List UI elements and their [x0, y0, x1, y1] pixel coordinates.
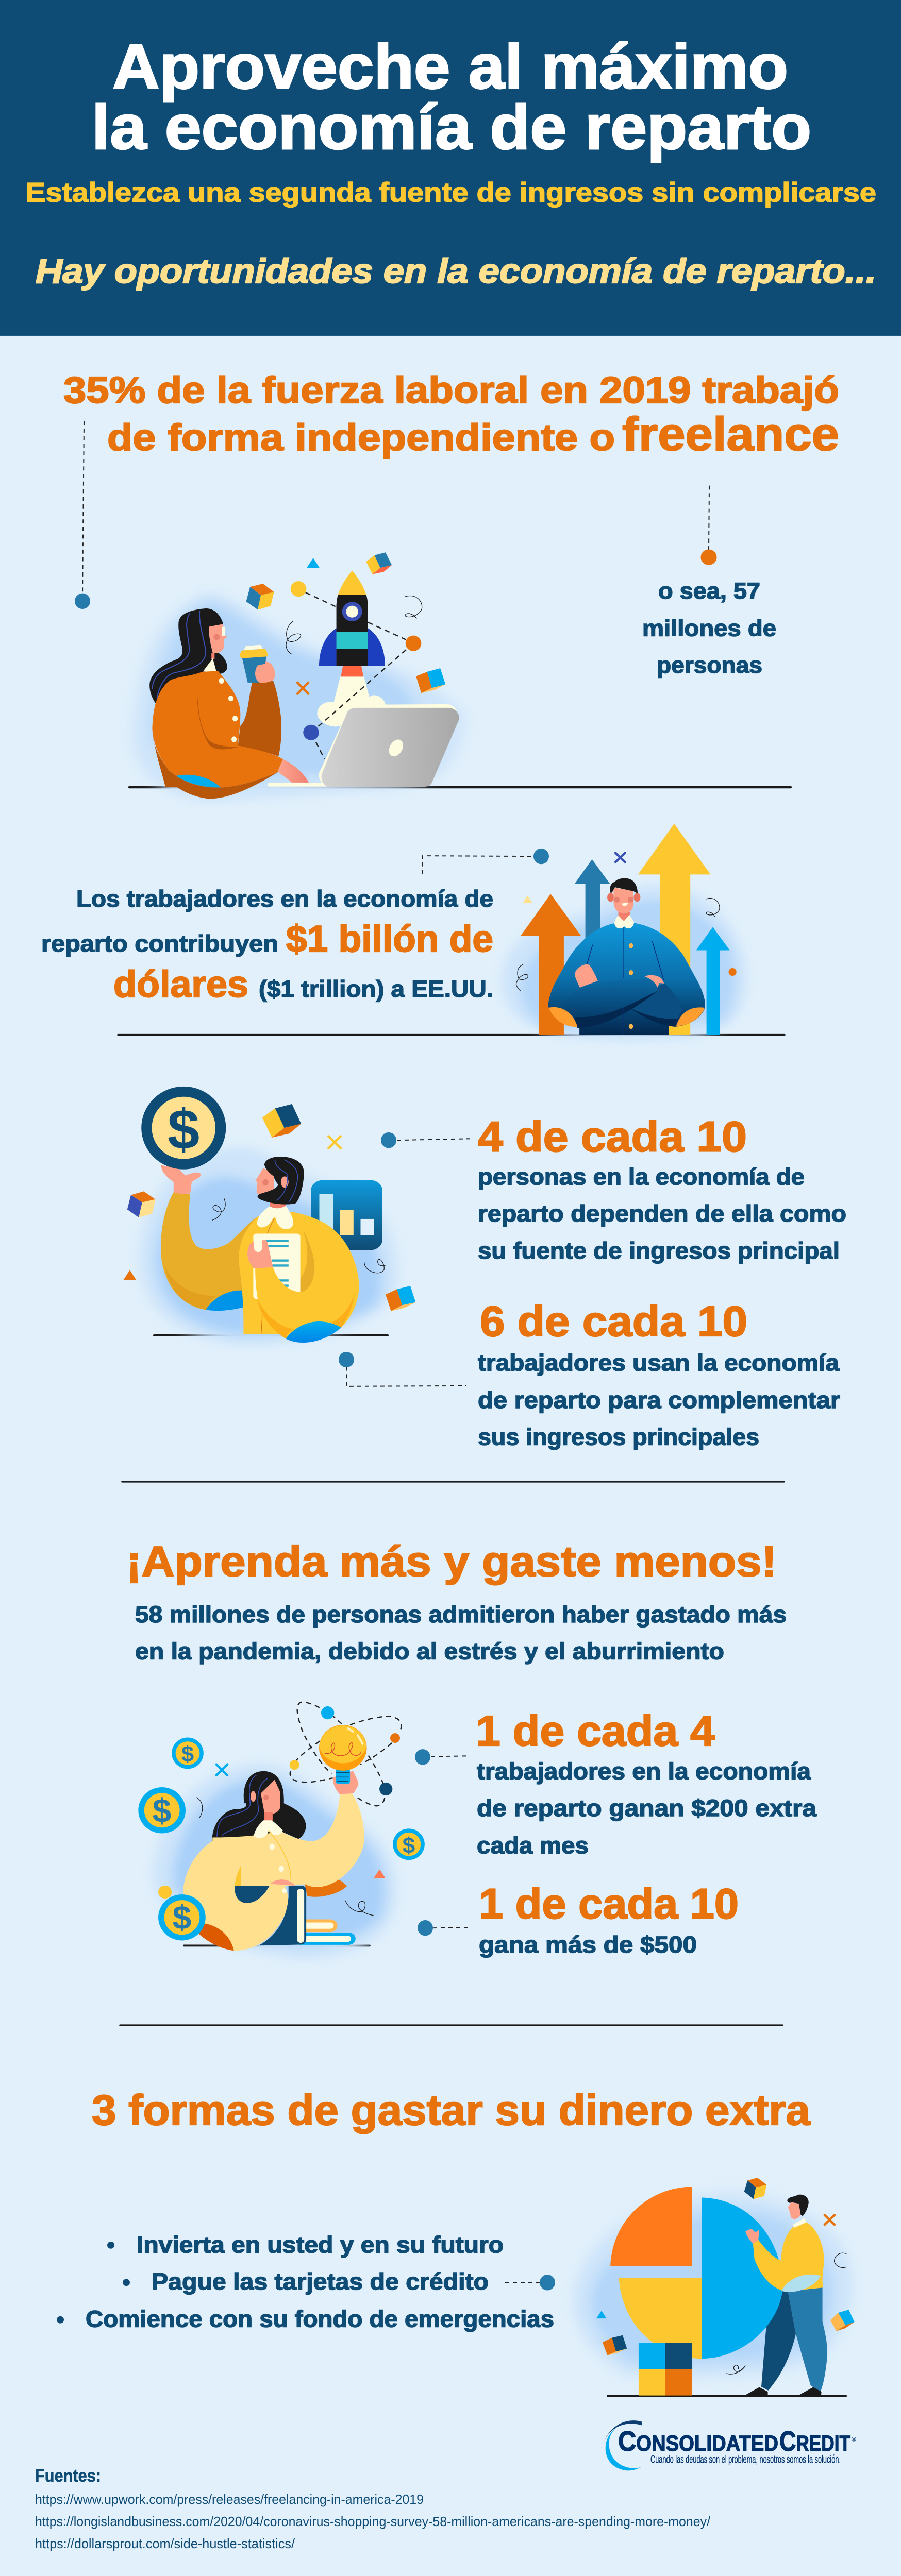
dollar signs on coins: $: [403, 1834, 415, 1858]
icon: cube orange: [416, 668, 445, 693]
text: trabajadores contribution: ($1 trillion) a EE.UU.: [259, 976, 493, 1002]
dollar sign on coin: $: [168, 1098, 199, 1161]
stat: 6 de cada 10: sus ingresos principales: [478, 1424, 759, 1450]
floor line 5: [608, 2395, 846, 2397]
stat: 4 de cada 10: personas en la economía de: [478, 1164, 805, 1190]
bullet list: Invierta en usted y en su futuro: [137, 2232, 504, 2258]
icon: cube top: [744, 2178, 766, 2199]
icon: dollar coin: [141, 1087, 226, 1170]
divider section 2: [120, 2024, 782, 2026]
text: trabajadores contribution: $1 billón de: [286, 918, 493, 960]
title: Aproveche al máximo: [112, 31, 788, 102]
text: 58 millones: [135, 1601, 787, 1664]
subtitle: Establezca una segunda fuente de ingresos sin complicarse: [26, 178, 876, 208]
logo: Consolidated Credit: ®: [852, 2436, 856, 2443]
icon: cube yellow: [366, 552, 392, 574]
icon: light bulb: [319, 1725, 367, 1771]
icon: cube right: [830, 2310, 855, 2331]
icon: cube cyan: [386, 1286, 415, 1311]
bullet list: Pague las tarjetas de crédito: [152, 2268, 489, 2295]
illustration: man with growth arrows: [502, 824, 746, 1041]
stat: 4 de cada 10: reparto dependen de ella como: [478, 1200, 846, 1227]
heading: aprenda mas: ¡Aprenda más y gaste menos!: [126, 1538, 777, 1585]
stat: 4 de cada 10: su fuente de ingresos principal: [478, 1238, 840, 1264]
figure: man: [702, 2195, 827, 2396]
icon: triangle: [523, 895, 532, 903]
stat: 6 de cada 10: [478, 1298, 840, 1450]
stat: 6 de cada 10: de reparto para complementar: [478, 1387, 840, 1413]
heading: 35% freelance: de forma independiente o: [107, 417, 615, 459]
header band: [0, 0, 901, 336]
title: la economía de reparto: [92, 92, 811, 162]
icon: triangle: [374, 1869, 386, 1878]
text: trabajadores contribution: reparto contribuyen: [41, 931, 278, 957]
sources: [35, 2465, 711, 2551]
stat: 1 de cada 4: trabajadores en la economía: [477, 1758, 811, 1784]
floor line 2: [118, 1034, 785, 1036]
callout connector bullets: [505, 2275, 555, 2290]
icon: x mark: [328, 1137, 341, 1148]
squiggles: [196, 1798, 374, 1916]
dollar signs on coins: $: [173, 1899, 191, 1936]
figure: woman with paper: [161, 1157, 359, 1343]
heading: 35% freelance: [63, 369, 839, 461]
squiggles: [516, 899, 720, 991]
text: trabajadores contribution: dólares: [113, 963, 248, 1005]
text: o sea 57 millones: o sea, 57: [658, 579, 760, 604]
text: 58 millones: 58 millones de personas admitieron haber gastado más: [135, 1601, 787, 1628]
stat: 4 de cada 10: [478, 1113, 846, 1264]
sources: Fuentes:: [35, 2465, 101, 2486]
stat: 1 de cada 4: cada mes: [477, 1833, 589, 1858]
logo: Consolidated Credit: CONSOLIDATED: [618, 2426, 778, 2457]
icon: cube navy: [262, 1104, 301, 1138]
colour blocks: [639, 2343, 692, 2396]
heading: 35% freelance: freelance: [622, 408, 839, 461]
bullet list: [57, 2232, 554, 2332]
stat: 6 de cada 10: trabajadores usan la economía: [478, 1350, 840, 1376]
icon: laptop: [268, 708, 459, 787]
callout connector top: [422, 849, 549, 874]
icon: triangle: [307, 558, 320, 568]
dollar signs on coins: $: [153, 1792, 171, 1829]
icon: x mark: [297, 683, 308, 694]
icon: coins: [138, 1737, 425, 1940]
figure: woman: [183, 1769, 364, 1951]
illustration: man with pie chart: [573, 2178, 855, 2396]
stat: 6 de cada 10: 6 de cada 10: [480, 1298, 747, 1345]
arrow: orange: [521, 894, 581, 1035]
squiggles: [212, 1198, 386, 1273]
callout connector 4 de 10: [381, 1132, 470, 1148]
arrow: cyan: [696, 927, 730, 1035]
figure: woman: [149, 608, 309, 799]
heading: 3 formas: 3 formas de gastar su dinero extra: [92, 2087, 811, 2134]
atom orbits: [290, 1702, 402, 1806]
title: [92, 31, 811, 162]
squiggles: [286, 596, 422, 654]
dollar signs on coins: [153, 1742, 415, 1936]
stat: 1 de cada 4: de reparto ganan $200 extra: [477, 1795, 817, 1821]
icon: triangle: [123, 1270, 136, 1280]
text: o sea 57 millones: [642, 579, 776, 678]
stat: 1 de cada 10: 1 de cada 10: [479, 1880, 739, 1927]
logo: Consolidated Credit: CREDIT: [779, 2426, 850, 2457]
arrow: yellow: [638, 824, 711, 1035]
icon: bar chart panel: [311, 1180, 382, 1250]
squiggles: [726, 2253, 847, 2374]
intro line: Hay oportunidades en la economía de reparto...: [36, 252, 876, 291]
text: o sea 57 millones: millones de: [642, 616, 776, 641]
illustration: man with coin and chart: [123, 1087, 415, 1345]
icon: rocket: [317, 570, 458, 726]
divider section 1: [122, 1481, 784, 1483]
icon: cube blue: [246, 584, 274, 609]
stat: 1 de cada 4: 1 de cada 4: [476, 1707, 715, 1755]
stat: 1 de cada 10: gana más de $500: [479, 1932, 697, 1958]
dollar signs on coins: $: [181, 1742, 194, 1767]
floor line 1: [129, 786, 791, 788]
pie chart: [610, 2187, 702, 2359]
text: trabajadores contribution: Los trabajadores en la economía de: [76, 886, 493, 912]
callout connector 1 de 10: [418, 1920, 469, 1936]
books: [293, 1920, 356, 1945]
callout connector 1 de 4: [415, 1749, 466, 1765]
figure: man: [548, 878, 705, 1035]
stat: 1 de cada 4: [476, 1707, 817, 1858]
heading: 35% freelance: 35% de la fuerza laboral en 2019 trabajó: [63, 369, 839, 411]
icon: cube left: [603, 2335, 627, 2355]
illustration: woman with light bulb and coins: [138, 1702, 425, 1959]
floor line 3: [154, 1334, 388, 1336]
stat: 4 de cada 10: 4 de cada 10: [478, 1113, 747, 1161]
icon: x mark: [825, 2215, 835, 2225]
icon: cube indigo: [127, 1191, 156, 1217]
icon: x mark: [615, 853, 625, 862]
sources: https://longislandbusiness.com/2020/04/coronavirus-shopping-survey-58-million-americans-are-spending-more-money/: [35, 2515, 711, 2529]
stat: 1 de cada 10: [479, 1880, 739, 1958]
icon: x mark: [216, 1765, 227, 1775]
bullet list: Comience con su fondo de emergencias: [86, 2306, 554, 2332]
arrow: dark blue: [575, 859, 610, 940]
text: 58 millones: en la pandemia, debido al estrés y el aburrimiento: [135, 1638, 724, 1664]
floor line 4: [184, 1944, 370, 1946]
callout connector right: [701, 486, 716, 565]
sources: https://dollarsprout.com/side-hustle-statistics/: [35, 2537, 295, 2551]
text: o sea 57 millones: personas: [657, 653, 762, 678]
icon: dot: [728, 968, 737, 976]
illustration: woman with laptop and rocket: [132, 552, 464, 802]
callout connector left: [75, 421, 90, 609]
icon: triangle: [596, 2311, 607, 2318]
dashed network: [291, 581, 421, 759]
sources: https://www.upwork.com/press/releases/freelancing-in-america-2019: [35, 2493, 424, 2507]
logo: Consolidated Credit: [601, 2420, 856, 2470]
text: trabajadores contribution: [41, 886, 493, 1005]
callout connector 6 de 10: [339, 1352, 466, 1386]
